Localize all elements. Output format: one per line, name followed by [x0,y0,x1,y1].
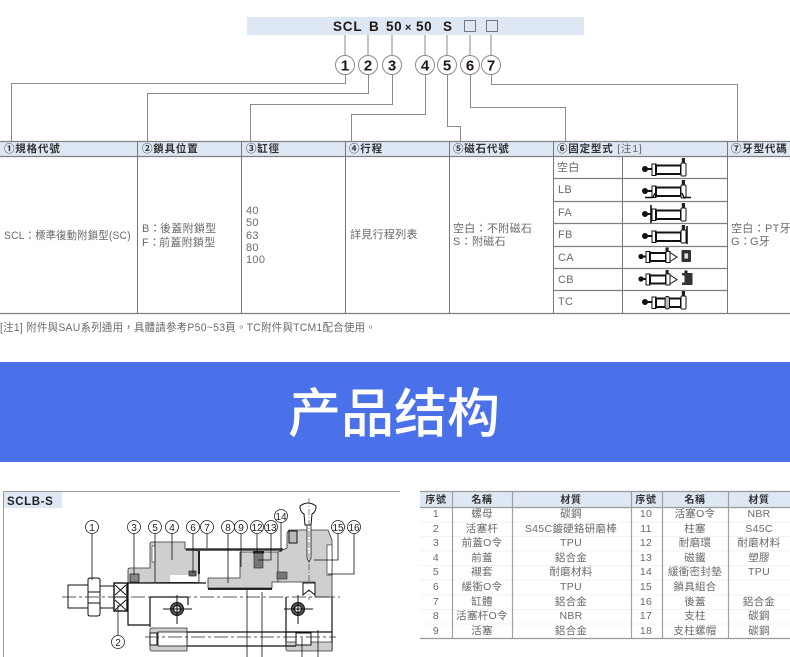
parts rows 10-18: 14 [640,566,652,578]
table headers: ⑦牙型代碼 [731,142,788,155]
column text: mounting codes: LB [558,184,572,196]
column text: thread: 空白： [731,223,765,235]
parts rows 10-18: 活塞O令 [675,507,716,520]
parts rows 1-9: 4 [433,552,439,564]
parts rows 1-9: 5 [433,566,439,578]
front cover seals [130,574,139,582]
column text: magnet: 不附磁石 [487,221,532,235]
part number callouts: 12 [251,523,263,534]
parts rows 1-9: TPU [560,537,582,549]
parts rows 1-9: 鋁合金 [555,624,587,637]
rear cover and lock block [278,530,332,597]
cylinder cross-section [62,498,340,651]
parts rows 1-9: 1 [433,508,439,520]
model code bar: B [369,19,379,34]
model code bar [247,17,584,35]
piston [208,552,278,588]
numbered code circles: 3 [388,58,396,74]
parts rows 10-18: 鎖具組合 [673,580,717,593]
table headers: ⑥固定型式 [注1] [557,142,643,155]
column text: bore sizes: 100 [246,254,265,266]
parts table header: 名稱 [471,493,493,506]
parts rows 1-9: 碳鋼 [560,507,582,520]
piston rod body [128,583,206,627]
parts rows 1-9: 前蓋 [471,551,493,564]
parts rows 1-9: S45C鍍硬鉻研磨棒 [525,522,617,535]
magnet and wear ring [254,552,263,568]
numbered code circles: 2 [364,58,372,74]
part number callouts: 1 [89,523,95,534]
model code bar: SCL [333,19,362,34]
parts rows 10-18: 耐磨環 [679,536,711,549]
column text: mounting codes: CB [558,274,574,286]
part number callouts: 8 [225,523,231,534]
parts rows 1-9: 缸體 [471,595,493,608]
parts rows 1-9 [433,507,617,637]
front cover and barrel [128,542,199,583]
column text: mounting codes [557,160,580,308]
column text: lock position [142,221,216,249]
parts rows 10-18: 15 [640,581,652,593]
parts rows 1-9: 7 [433,596,439,608]
blue section banner [0,362,790,462]
parts table header: 材質 [748,493,770,506]
parts table header: 序號 [635,493,657,506]
parts rows 1-9: 9 [433,625,439,637]
parts rows 1-9: 活塞 [471,624,493,637]
numbered code circles: 1 [341,58,349,74]
column text: magnet: 空白： [453,223,487,235]
parts rows 1-9: 2 [433,523,439,535]
parts rows 1-9: 8 [433,610,439,622]
column text: bore sizes: 50 [246,217,259,229]
parts rows 1-9: 活塞杆O令 [456,609,508,622]
part number callouts: 3 [131,523,137,534]
connector lines from code to table columns [12,35,738,141]
parts rows 10-18: 支柱 [684,609,706,622]
column text: thread: G牙 [750,236,770,248]
part number callouts [86,510,360,657]
threaded rod end [68,585,90,608]
parts table header: 序號 [425,493,447,506]
part number callouts: 2 [115,638,121,649]
parts table header: 材質 [560,493,582,506]
column text: bore sizes: 80 [246,242,259,254]
parts rows 1-9: 鋁合金 [555,551,587,564]
column text: bore sizes [246,205,265,266]
table headers: ⑤磁石代號 [453,142,510,155]
table headers: ①規格代號 [4,142,60,155]
parts rows 10-18: S45C [745,523,773,535]
parts rows 10-18: 10 [640,508,652,520]
parts table header: 名稱 [684,493,706,506]
lower tie rod [150,628,332,651]
column text: thread: G： [731,236,751,248]
table headers: ④行程 [349,142,383,155]
drawing label: SCLB-S [7,496,53,508]
parts rows 10-18: 16 [640,596,652,608]
part number callouts: 6 [190,523,196,534]
section title: 产品结构 [288,372,500,448]
drawing label [4,492,62,508]
parts rows 10-18: 18 [640,625,652,637]
part number callouts: 15 [332,523,344,534]
column text: lock position: B： [142,223,161,235]
column text: lock position: 後蓋附鎖型 [160,221,216,235]
part number callouts: 4 [169,523,175,534]
column text: magnet: 附磁石 [472,234,506,248]
part number callouts: 16 [348,523,360,534]
column text: bore sizes: 63 [246,230,259,242]
parts rows 10-18: 11 [640,523,652,535]
barrel outer tube [186,548,283,551]
numbered code circles: 5 [443,58,451,74]
parts rows 10-18: NBR [747,508,771,520]
parts rows 10-18: 13 [640,552,652,564]
parts rows 1-9: 活塞杆 [466,522,498,535]
numbered code circles: 7 [487,58,495,74]
model code bar: × [405,22,411,34]
parts rows 10-18: 耐磨材料 [737,536,781,549]
footnote: [注1] 附件與SAU系列通用，具體請参考P50~53頁。TC附件與TCM1配合使用。 [0,320,376,334]
part number callouts: 7 [204,523,210,534]
part number callouts: 5 [152,523,158,534]
parts rows 10-18: 柱塞 [684,522,706,535]
table headers [4,142,788,155]
column text: mounting codes: CA [558,252,574,264]
icon: LB foot mount [642,180,691,198]
numbered code circles [336,56,500,74]
column text: lock position: F： [142,237,160,249]
numbered code circles: 4 [421,58,430,74]
parts rows 1-9: 襯套 [471,565,493,578]
parts rows 10-18: 塑膠 [748,552,770,564]
column text: bore sizes: 40 [246,205,259,217]
part number callouts: 13 [265,523,277,534]
model code bar: S [443,19,452,34]
parts rows 10-18: 12 [640,537,652,549]
parts rows 10-18: 緩衝密封墊 [668,565,722,578]
parts rows 1-9: TPU [560,581,582,593]
numbered code circles: 6 [466,58,474,74]
parts rows 10-18: 17 [640,610,652,622]
parts rows 1-9: 3 [433,537,439,549]
icon: FB rear flange [642,225,687,244]
column text: magnet [453,221,532,248]
column text: mounting codes: FA [558,207,572,219]
parts rows 1-9: 緩衝O令 [462,580,503,593]
column text: lock position: 前蓋附鎖型 [159,235,216,249]
parts rows 1-9: 螺母 [471,508,493,520]
parts rows 1-9: 6 [433,581,439,593]
parts rows 10-18: 支柱螺帽 [673,624,717,637]
parts rows 10-18: TPU [748,566,770,578]
lock knob [300,503,316,525]
table headers: ③缸徑 [246,142,280,155]
part number callouts: 9 [238,523,244,534]
icon: TC trunnion [642,291,686,309]
part number callouts: 14 [275,512,287,523]
parts table header [425,493,770,506]
specification table [0,141,790,314]
column text: mounting codes: TC [558,296,573,308]
column text: stroke: 詳見行程列表 [350,227,418,241]
table headers: ②鎖具位置 [142,142,198,155]
model code bar: 50 [386,19,402,34]
column text: mounting codes: 空白 [557,160,580,174]
parts rows 1-9: 耐磨材料 [549,565,593,578]
parts rows 10-18 [640,507,781,637]
icon: basic cylinder [642,158,686,176]
model code bar: 50 [416,19,432,34]
parts rows 10-18: 後蓋 [684,595,706,608]
icon: CB double clevis [638,270,692,285]
column text: magnet: S： [453,236,472,248]
bolts [163,595,313,624]
column text: thread [731,221,790,248]
parts rows 1-9: NBR [559,610,583,622]
centre lines [62,597,340,637]
parts rows 10-18: 磁鐵 [684,551,706,564]
parts list table [420,492,790,638]
column text: mounting codes: FB [558,229,573,241]
icon: CA clevis [638,248,691,262]
parts rows 10-18: 碳鋼 [748,624,770,637]
icon: FA front flange [642,203,686,223]
panel: SCLB-S section drawing [4,492,400,657]
parts rows 1-9: 前蓋O令 [462,536,503,549]
parts rows 10-18: 鋁合金 [743,595,775,608]
parts rows 1-9: 鋁合金 [555,595,587,608]
rod seal block [114,583,127,611]
column text: type: SCL：標準復動附鎖型(SC) [4,228,131,242]
parts rows 10-18: 碳鋼 [748,609,770,622]
